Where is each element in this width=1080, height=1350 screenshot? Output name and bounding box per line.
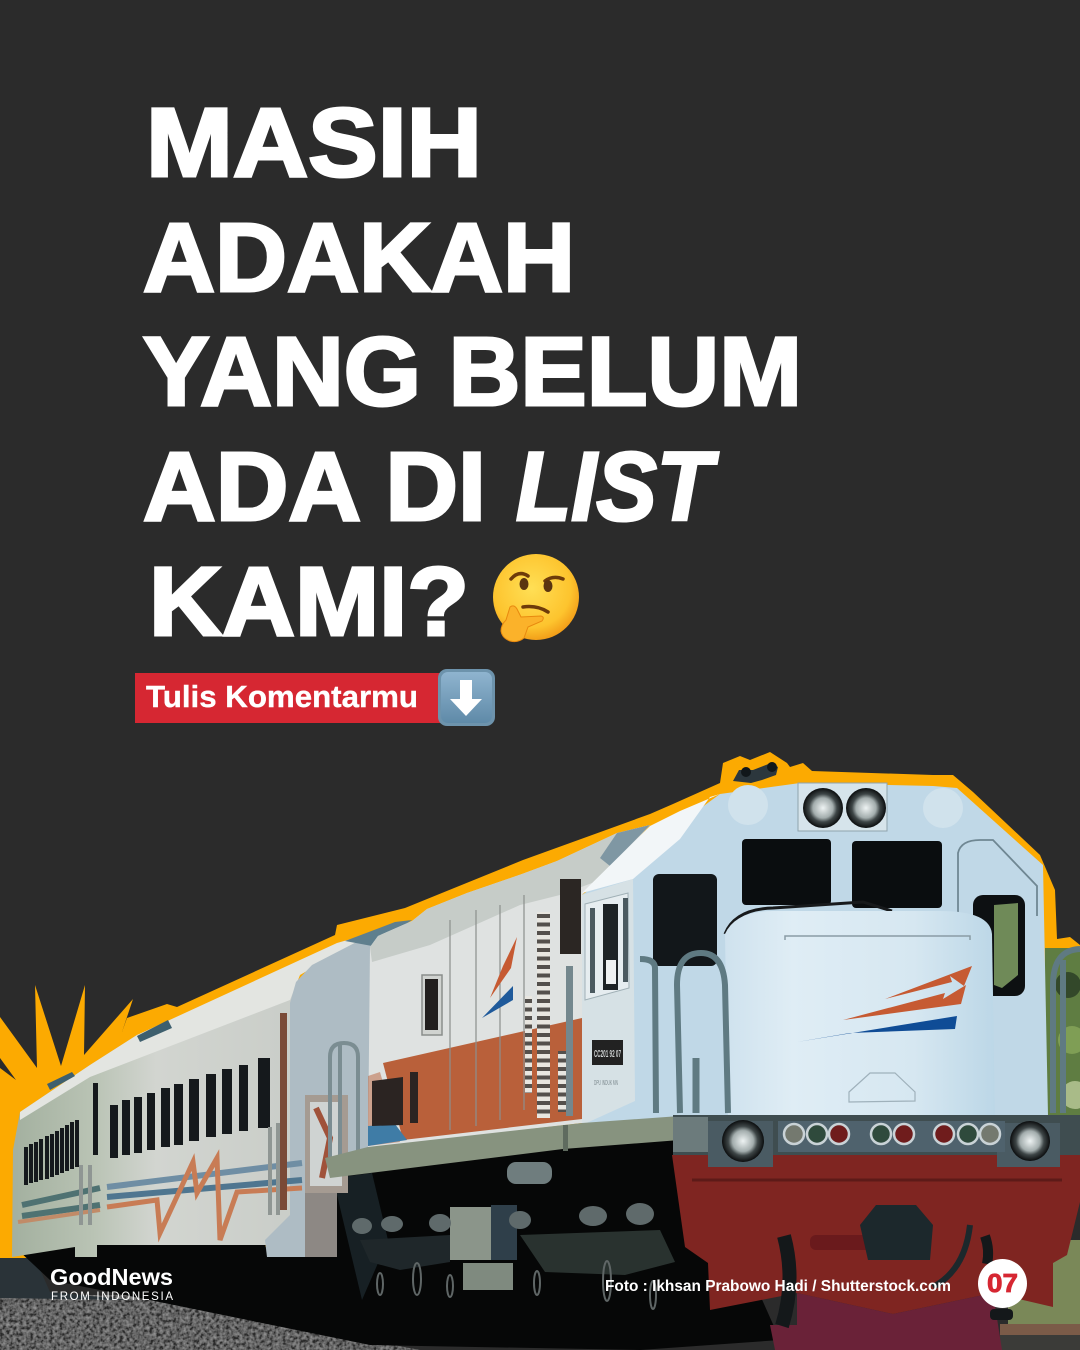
headlight panel: [798, 783, 887, 831]
undercarriage: [18, 1135, 780, 1350]
title: YANG BELUM: [143, 317, 802, 426]
ground and rail: [0, 1258, 1080, 1350]
title: LIST: [516, 432, 719, 541]
page number badge: 07: [987, 1268, 1018, 1298]
icon: thinking face emoji: [493, 554, 579, 642]
photo credit: Foto : Ikhsan Prabowo Hadi / Shutterstock.com: [605, 1278, 951, 1295]
logo: GoodNews from Indonesia: GoodNews: [50, 1264, 173, 1290]
locomotive logo: [797, 966, 972, 1042]
callout: tulis komentarmu: Tulis Komentarmu: [146, 679, 418, 714]
air horn: [733, 763, 778, 783]
locomotive running board: [325, 1116, 680, 1178]
cab side windows: [585, 893, 629, 1000]
carriage livery stripes: [18, 1158, 302, 1240]
locomotive hood: [368, 825, 650, 1148]
horn discs: [728, 785, 768, 825]
carriage windows: [24, 1058, 270, 1185]
locomotive nose: [725, 911, 995, 1116]
locomotive cab: [582, 762, 1048, 1125]
locomotive cab: CC201 92 07: [594, 1049, 621, 1060]
hood louvres: [525, 912, 567, 1118]
front windows: [742, 839, 831, 905]
door and door window: [958, 840, 1037, 996]
coupler and chains: [692, 1180, 1062, 1326]
orange burst outline: [0, 752, 1080, 1260]
title: ADA DI: [143, 432, 486, 541]
carriage doors and handrails: [81, 1013, 358, 1225]
title: MASIH: [146, 88, 482, 197]
number plate: DPU INDUK MN: [594, 1080, 618, 1087]
handrails: [640, 949, 1080, 1113]
foliage behind locomotive: [1008, 948, 1080, 1328]
carriage: [12, 920, 412, 1257]
title: KAMI?: [149, 547, 469, 656]
logo: GoodNews from Indonesia: [50, 1264, 173, 1303]
number plate: [592, 1040, 623, 1087]
callout: tulis komentarmu: [135, 673, 441, 723]
title: ADAKAH: [143, 203, 575, 312]
marker lights: [784, 1124, 1000, 1144]
side window: [653, 874, 717, 966]
logo: GoodNews from Indonesia: FROM INDONESIA: [51, 1291, 173, 1303]
photo: train with orange outline: [0, 752, 1080, 1350]
title: [143, 88, 802, 656]
hood logo: [490, 937, 517, 998]
front pilot and lights: [672, 1115, 1080, 1350]
page number badge: [978, 1259, 1027, 1308]
icon: down arrow button: [438, 669, 495, 726]
